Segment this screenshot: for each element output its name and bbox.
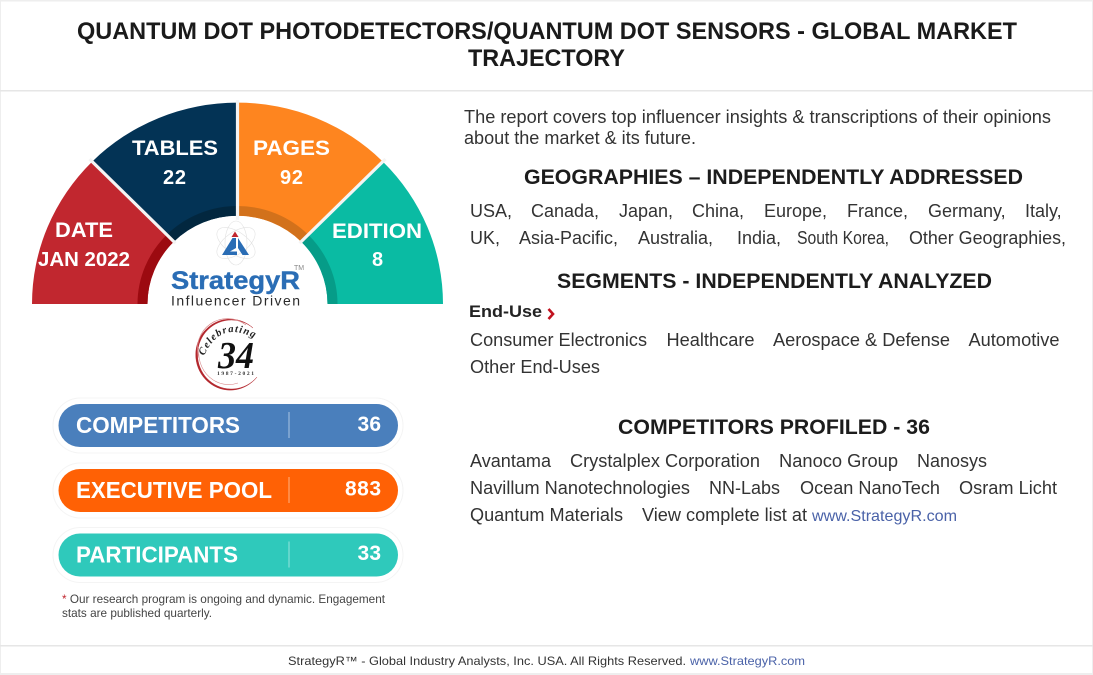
logo wordmark [171, 265, 304, 308]
geographies list: Germany, [928, 201, 1006, 221]
segments list: Other End-Uses [470, 357, 600, 377]
segments list [470, 330, 1060, 377]
badge: celebrating 34 years [195, 318, 258, 390]
intro text: about the market & its future. [464, 128, 696, 148]
competitors list: Avantama [470, 451, 552, 471]
label: date: DATE [55, 218, 113, 242]
segments list: Healthcare [666, 330, 754, 350]
heading: segments: SEGMENTS - INDEPENDENTLY ANALYZED [557, 270, 992, 293]
label: edition: 8 [372, 249, 383, 271]
heading: geographies: GEOGRAPHIES – INDEPENDENTLY ADDRESSED [524, 166, 1023, 189]
geographies list: Australia, [638, 228, 713, 248]
geographies list: Canada, [531, 201, 599, 221]
pill: competitors: COMPETITORS [76, 412, 240, 438]
competitors list: www.StrategyR.com [811, 508, 957, 525]
geographies list: UK, [470, 228, 500, 248]
geographies list: Asia-Pacific, [519, 228, 618, 248]
geographies list: Europe, [764, 201, 827, 221]
label: tables: 22 [163, 167, 186, 189]
logo wordmark: StrategyR [171, 267, 300, 295]
competitors list: Nanosys [917, 451, 987, 471]
heading: competitors: COMPETITORS PROFILED - 36 [618, 416, 930, 439]
label: date [38, 218, 130, 271]
competitors list: Nanoco Group [779, 451, 898, 471]
pill: participants: 33 [358, 542, 381, 565]
geographies list: India, [737, 228, 781, 248]
label: end-use: End-Use [469, 303, 542, 321]
competitors list [470, 451, 1057, 525]
badge: celebrating 34 years: 1987-2021 [217, 371, 254, 377]
footnote [62, 592, 386, 620]
geographies list: Japan, [619, 201, 673, 221]
icon: StrategyR logo mark [212, 221, 260, 265]
semicircle gauge: report facts [32, 100, 443, 304]
footer: StrategyR™ - Global Industry Analysts, Inc. USA. All Rights Reserved. [288, 654, 686, 668]
pill: executive pool: 883 [345, 478, 381, 500]
label: edition: EDITION [332, 219, 422, 243]
competitors list: Navillum Nanotechnologies [470, 478, 690, 498]
segments list: Consumer Electronics [470, 330, 647, 350]
badge: celebrating 34 years: Celebrating [199, 326, 256, 355]
label: date: JAN 2022 [38, 249, 130, 271]
segment: edition [301, 162, 443, 304]
pill: competitors [53, 398, 403, 453]
footnote: stats are published quarterly. [62, 606, 212, 620]
pill: executive pool: EXECUTIVE POOL [76, 477, 272, 503]
footer: www.StrategyR.com [689, 654, 805, 668]
title: TRAJECTORY [468, 45, 625, 72]
intro text [464, 107, 1051, 148]
pill: executive pool [53, 463, 403, 518]
competitors list: Osram Licht [959, 478, 1057, 498]
geographies list: USA, [470, 201, 512, 221]
label: pages: PAGES [253, 136, 330, 160]
geographies list: South Korea, [797, 228, 889, 248]
geographies list: France, [847, 201, 908, 221]
pill: competitors: 36 [358, 413, 381, 436]
pill: participants [53, 528, 403, 582]
label: tables: TABLES [132, 136, 218, 160]
segment: tables [92, 103, 238, 242]
segments list: Aerospace & Defense [773, 330, 950, 350]
geographies list: Other Geographies, [909, 228, 1066, 248]
segment: date [32, 162, 174, 304]
competitors list: Quantum Materials [470, 505, 623, 525]
title: QUANTUM DOT PHOTODETECTORS/QUANTUM DOT SENSORS - GLOBAL MARKET [77, 18, 1017, 45]
segments list: Automotive [968, 330, 1060, 350]
competitors list: NN-Labs [709, 478, 780, 498]
intro text: The report covers top influencer insights & transcriptions of their opinions [464, 107, 1051, 127]
label: edition [332, 219, 422, 271]
geographies list: Italy, [1025, 201, 1062, 221]
logo wordmark: TM [294, 265, 304, 272]
title [77, 18, 1017, 72]
logo wordmark: Influencer Driven [171, 292, 300, 308]
geographies list [470, 201, 1066, 248]
competitors list: Crystalplex Corporation [570, 451, 760, 471]
geographies list: China, [692, 201, 744, 221]
label: pages: 92 [280, 167, 303, 189]
segment: pages [238, 103, 383, 242]
badge: celebrating 34 years: 34 [217, 335, 254, 377]
label: tables [132, 136, 218, 189]
competitors list: Ocean NanoTech [800, 478, 940, 498]
icon: chevron [548, 309, 553, 319]
label: pages [253, 136, 330, 189]
competitors list: View complete list at [642, 505, 807, 525]
footnote: * Our research program is ongoing and dynamic. Engagement [62, 592, 386, 606]
pill: participants: PARTICIPANTS [76, 542, 238, 568]
